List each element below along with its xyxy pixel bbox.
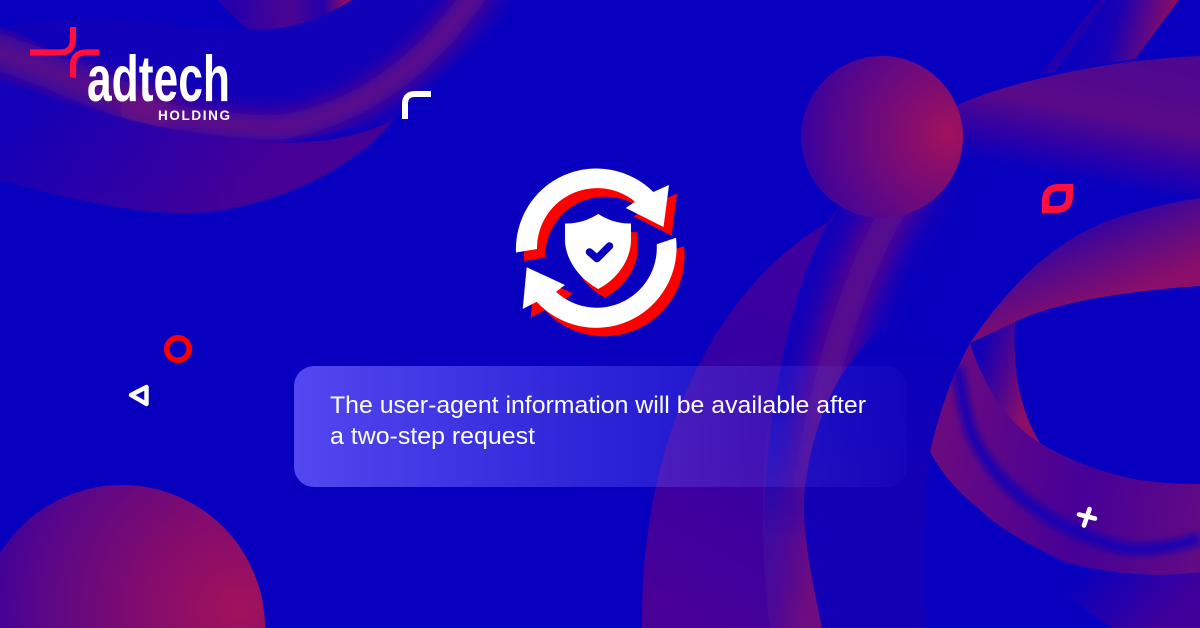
- panel text: [330, 392, 866, 450]
- shape: large arch: [642, 208, 838, 628]
- shape: upper sphere: [801, 56, 963, 218]
- shape: diagonal stick: [1040, 0, 1179, 75]
- icon: check mark: [590, 246, 610, 258]
- shape: top-left ribbon: [0, 0, 510, 213]
- icon: white arrows: [516, 168, 677, 328]
- shape: lower right fold: [997, 530, 1200, 628]
- panel text: a two-step request: [330, 423, 535, 450]
- logo subtitle: HOLDING: [158, 108, 230, 123]
- panel text: The user-agent information will be available after: [330, 392, 866, 419]
- decor: white corner: [405, 94, 431, 119]
- icon: white shield: [565, 214, 631, 289]
- decor: red leaf: [1046, 188, 1070, 210]
- logo wordmark: adtech: [87, 42, 230, 115]
- shape: main body ribbon: [803, 56, 1200, 500]
- icon shadow: red: [524, 177, 685, 336]
- logo mark: red cross: [30, 27, 99, 78]
- decor: red ring: [167, 338, 189, 360]
- decor: white plus: [1079, 509, 1095, 526]
- shape: bottom-left sphere: [0, 485, 265, 628]
- shape: inner arch shade: [804, 310, 958, 628]
- logo: adtech holding: [30, 27, 230, 123]
- shape: arch lower section: [763, 420, 822, 628]
- shape: right ring: [930, 322, 1200, 575]
- decor: white triangle: [131, 387, 146, 404]
- text panel: [294, 366, 907, 487]
- shape: upper right ribbon: [970, 198, 1200, 343]
- icon: refresh arrows with shield: [516, 168, 685, 336]
- icon shadow: shield: [572, 223, 638, 298]
